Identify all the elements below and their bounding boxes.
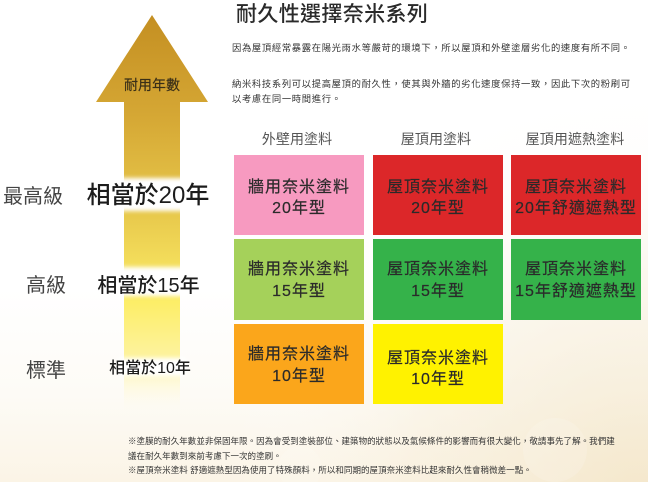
product: heat-shield roof 20: 屋頂奈米塗料: [525, 179, 627, 196]
product: roof 10: [373, 324, 503, 404]
product: roof 20: [373, 155, 503, 235]
product: heat-shield roof 20: 20年舒適遮熱型: [515, 200, 637, 217]
level: standard: 標準: [26, 360, 66, 382]
column heading: heat-shield roof: 屋頂用遮熱塗料: [526, 131, 624, 147]
product: roof 20: 20年型: [411, 200, 465, 217]
product: roof 15: 屋頂奈米塗料: [387, 261, 489, 278]
product: wall 10: [234, 324, 364, 404]
product: wall 15: 15年型: [272, 283, 326, 300]
product: heat-shield roof 15: 15年舒適遮熱型: [515, 283, 637, 300]
intro paragraph 2: [232, 79, 631, 104]
product: roof 15: 15年型: [411, 283, 465, 300]
intro paragraph 1: 因為屋頂經常暴露在陽光雨水等嚴苛的環境下，所以屋頂和外壁塗層劣化的速度有所不同。: [232, 43, 631, 53]
product: roof 15: [373, 239, 503, 320]
arrow label: 耐用年數: [124, 77, 180, 93]
product: heat-shield roof 15: [511, 239, 641, 320]
product: roof 20: 屋頂奈米塗料: [387, 179, 489, 196]
product: wall 15: 牆用奈米塗料: [248, 261, 350, 278]
level: high grade: 高級: [26, 275, 66, 297]
years: 15: 相當於15年: [97, 275, 200, 297]
title: 耐久性選擇奈米系列: [236, 3, 428, 26]
product: roof 10: 屋頂奈米塗料: [387, 350, 489, 367]
years: 20: 相當於20年: [87, 182, 209, 209]
product: wall 10: 牆用奈米塗料: [248, 346, 350, 363]
product: wall 15: [234, 239, 364, 320]
years: 10: 相當於10年: [109, 360, 191, 377]
column heading: roof: 屋頂用塗料: [401, 131, 471, 147]
product: heat-shield roof 20: [511, 155, 641, 235]
level: top grade: 最高級: [3, 186, 63, 208]
product: heat-shield roof 15: 屋頂奈米塗料: [525, 261, 627, 278]
intro paragraph 2: 納米科技系列可以提高屋頂的耐久性，使其與外牆的劣化速度保持一致，因此下次的粉刷可: [232, 79, 631, 89]
footnotes: ※屋頂奈米塗料 舒適遮熱型因為使用了特殊顏料，所以和同期的屋頂奈米塗料比起來耐久性會稍微差一點。: [128, 465, 532, 475]
arrow: durability years: [96, 15, 208, 398]
product: wall 10: 10年型: [272, 368, 326, 385]
footnotes: [128, 436, 615, 475]
footnotes: ※塗膜的耐久年數並非保固年限。因為會受到塗裝部位、建築物的狀態以及氣候條件的影響而有很大變化，敬請事先了解。我們建: [128, 436, 615, 446]
column heading: wall: 外壁用塗料: [262, 131, 332, 147]
intro paragraph 2: 以考慮在同一時間進行。: [232, 94, 342, 104]
product: wall 20: 牆用奈米塗料: [248, 179, 350, 196]
footnotes: 議在耐久年數到來前考慮下一次的塗刷。: [128, 451, 282, 461]
product: wall 20: [234, 155, 364, 235]
product: wall 20: 20年型: [272, 200, 326, 217]
product: roof 10: 10年型: [411, 371, 465, 388]
